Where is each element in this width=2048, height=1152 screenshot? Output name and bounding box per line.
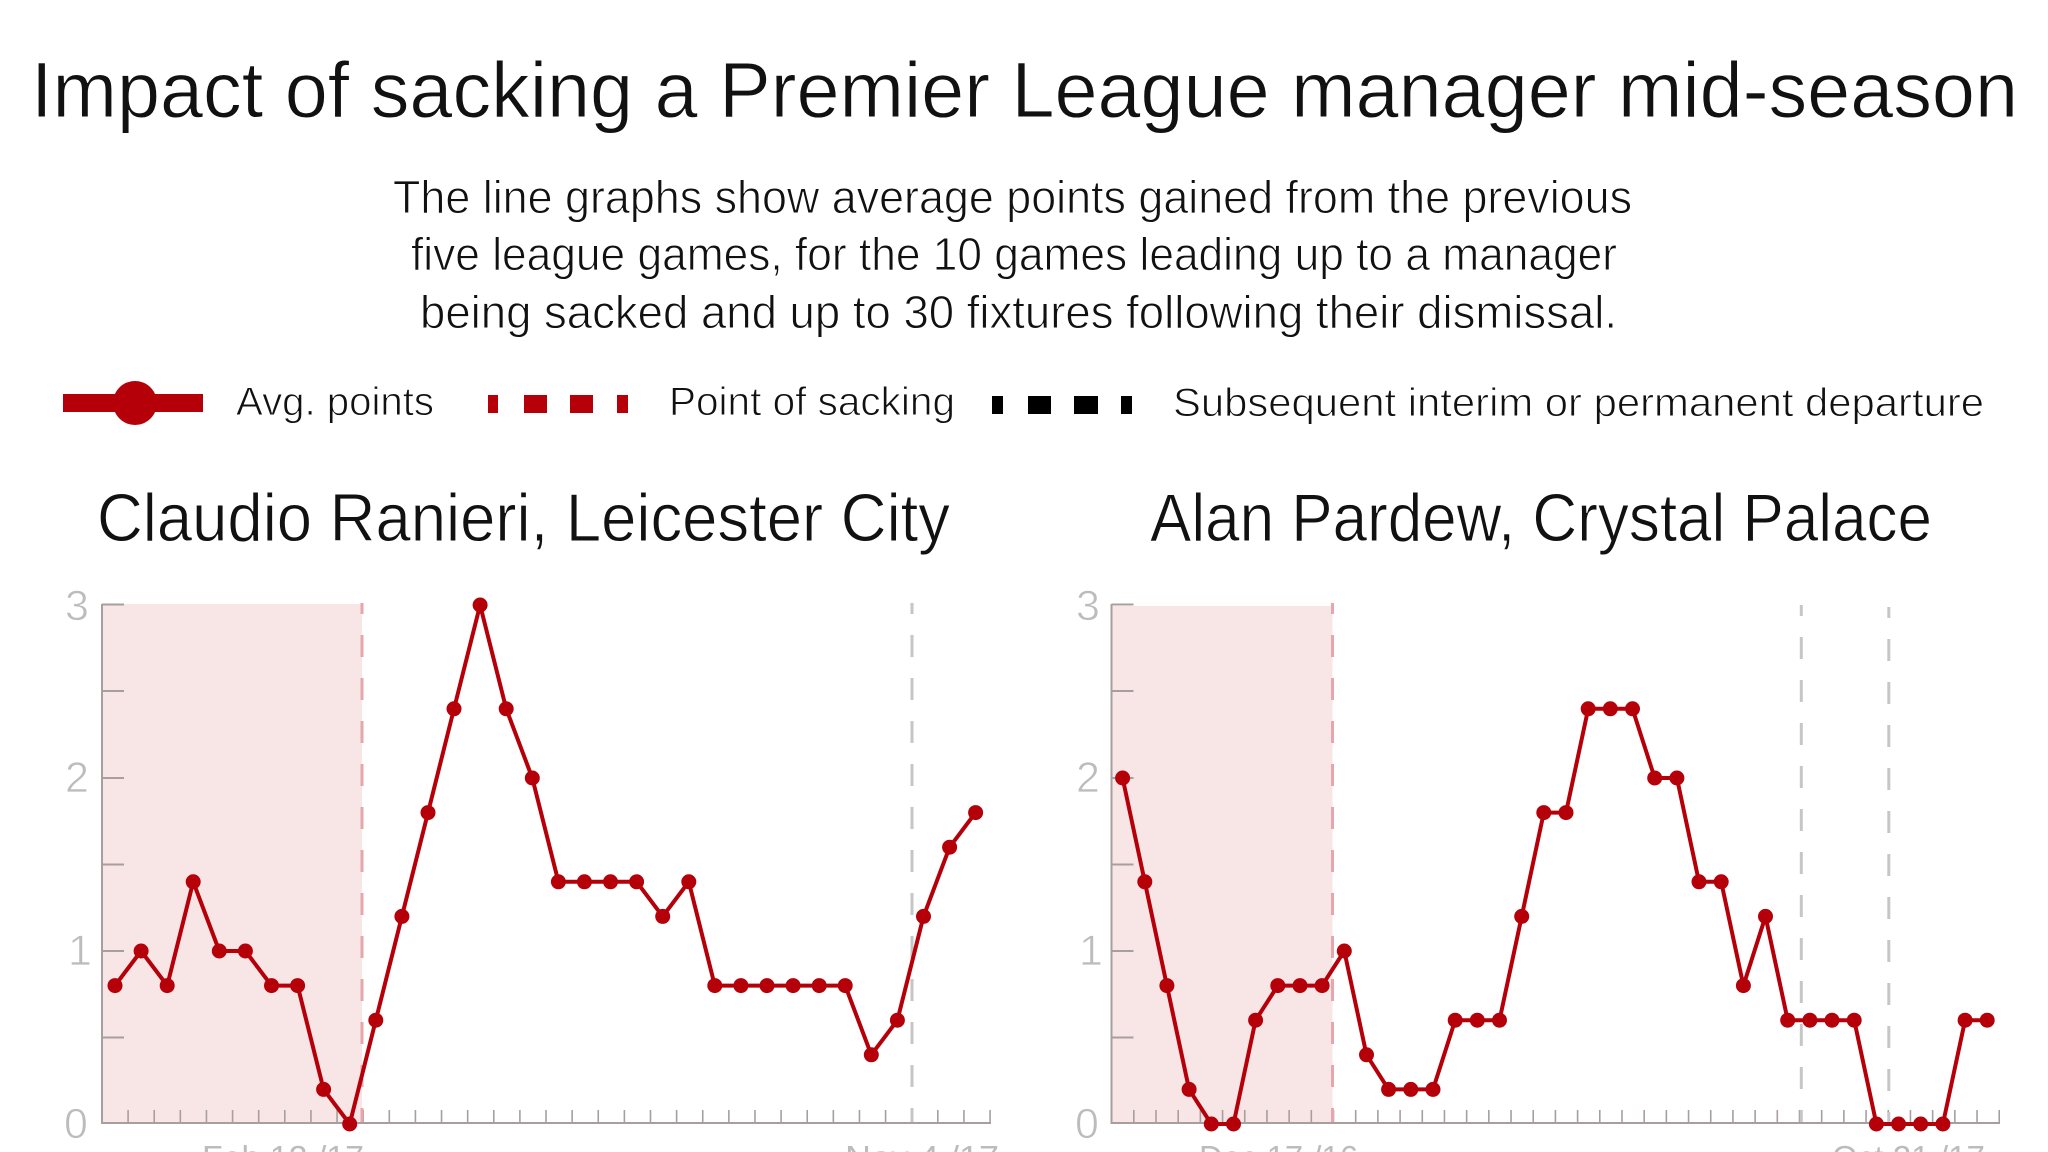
subtitle text block: The line graphs show average points gained from the previous <box>393 171 1632 223</box>
y-axis labels <box>1075 582 1103 1148</box>
sacking marker line <box>360 603 364 1122</box>
y-axis labels <box>64 582 92 1148</box>
panel: Ranieri chart <box>64 480 999 1152</box>
y-axis labels: 0 <box>1075 1100 1099 1148</box>
y-axis labels: 2 <box>65 754 89 802</box>
x-axis date labels <box>202 1139 999 1152</box>
y-axis labels: 0 <box>64 1100 88 1148</box>
x-axis date labels <box>1199 1139 1985 1152</box>
axes and ticks <box>1112 604 2000 1123</box>
legend: departure label: Subsequent interim or permanent departure <box>1173 381 1984 425</box>
heading: Ranieri: Claudio Ranieri, Leicester City <box>97 480 950 556</box>
y-axis labels: 3 <box>1076 582 1100 630</box>
shaded pre-sacking region <box>102 604 362 1123</box>
sacking marker line <box>1331 603 1334 1122</box>
panel: Pardew chart <box>1075 480 2000 1152</box>
departure marker line 1 <box>1800 605 1803 1122</box>
title: Impact of sacking a Premier League manager mid-season <box>31 45 2018 134</box>
legend <box>63 380 1984 425</box>
y-axis labels: 1 <box>1079 927 1103 975</box>
departure marker line <box>910 603 914 1122</box>
subtitle text block: being sacked and up to 30 fixtures following their dismissal. <box>420 286 1617 338</box>
legend: departure key <box>992 396 1132 414</box>
heading: Pardew: Alan Pardew, Crystal Palace <box>1150 480 1932 556</box>
y-axis labels: 2 <box>1076 754 1100 802</box>
legend: point of sacking key <box>488 395 628 413</box>
departure marker line 2 <box>1887 607 1890 1122</box>
line series: average points <box>1123 709 1987 1124</box>
legend: avg points key <box>63 381 203 425</box>
subtitle text block <box>393 171 1632 338</box>
line series: average points <box>115 605 976 1124</box>
subtitle text block: five league games, for the 10 games leading up to a manager <box>411 228 1617 280</box>
y-axis labels: 1 <box>68 927 92 975</box>
axes and ticks <box>102 604 991 1123</box>
legend: point of sacking label: Point of sacking <box>669 380 955 424</box>
shaded pre-sacking region <box>1112 606 1332 1123</box>
legend: avg points label: Avg. points <box>236 380 434 424</box>
y-axis labels: 3 <box>65 582 89 630</box>
